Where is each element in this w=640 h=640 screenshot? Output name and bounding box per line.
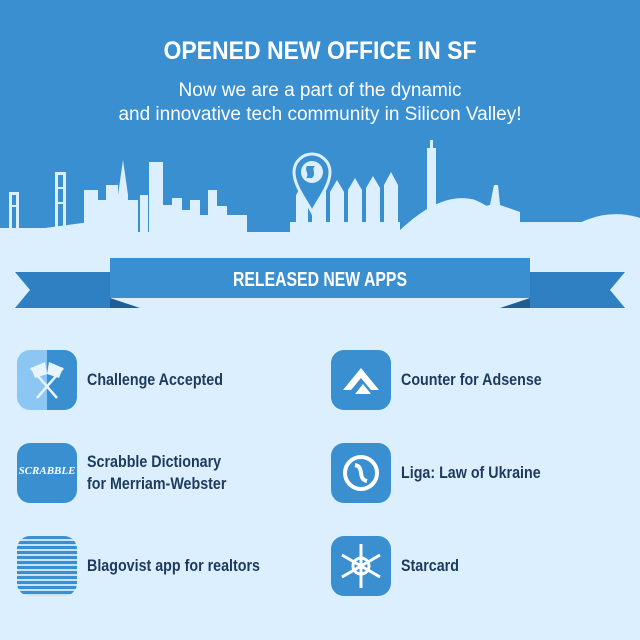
app: Challenge Accepted: [17, 350, 223, 410]
subtitle: Now we are a part of the dynamic: [178, 80, 462, 101]
header background with skyline: [0, 0, 640, 232]
app: Scrabble: SCRABBLE: [19, 465, 75, 477]
app: Scrabble: Scrabble Dictionary: [87, 452, 221, 471]
app: Starcard: [331, 536, 459, 596]
app: Blagovist: [17, 536, 260, 596]
app: Counter for Adsense: [331, 350, 542, 410]
ribbon heading: [15, 258, 625, 308]
app: Counter for Adsense: Counter for Adsense: [401, 370, 542, 389]
app: Scrabble: for Merriam-Webster: [87, 474, 226, 493]
ribbon heading: RELEASED NEW APPS: [233, 269, 407, 291]
subtitle: [118, 80, 522, 125]
subtitle: and innovative tech community in Silicon Valley!: [118, 104, 522, 125]
app: Scrabble: [17, 443, 226, 503]
app: Challenge Accepted: Challenge Accepted: [87, 370, 223, 389]
app: Liga: [331, 443, 541, 503]
app: Liga: Liga: Law of Ukraine: [401, 463, 541, 482]
app: Blagovist: Blagovist app for realtors: [87, 556, 260, 575]
icon: location pin: [292, 152, 332, 216]
title: OPENED NEW OFFICE IN SF: [163, 37, 477, 65]
app: Starcard: Starcard: [401, 556, 459, 575]
